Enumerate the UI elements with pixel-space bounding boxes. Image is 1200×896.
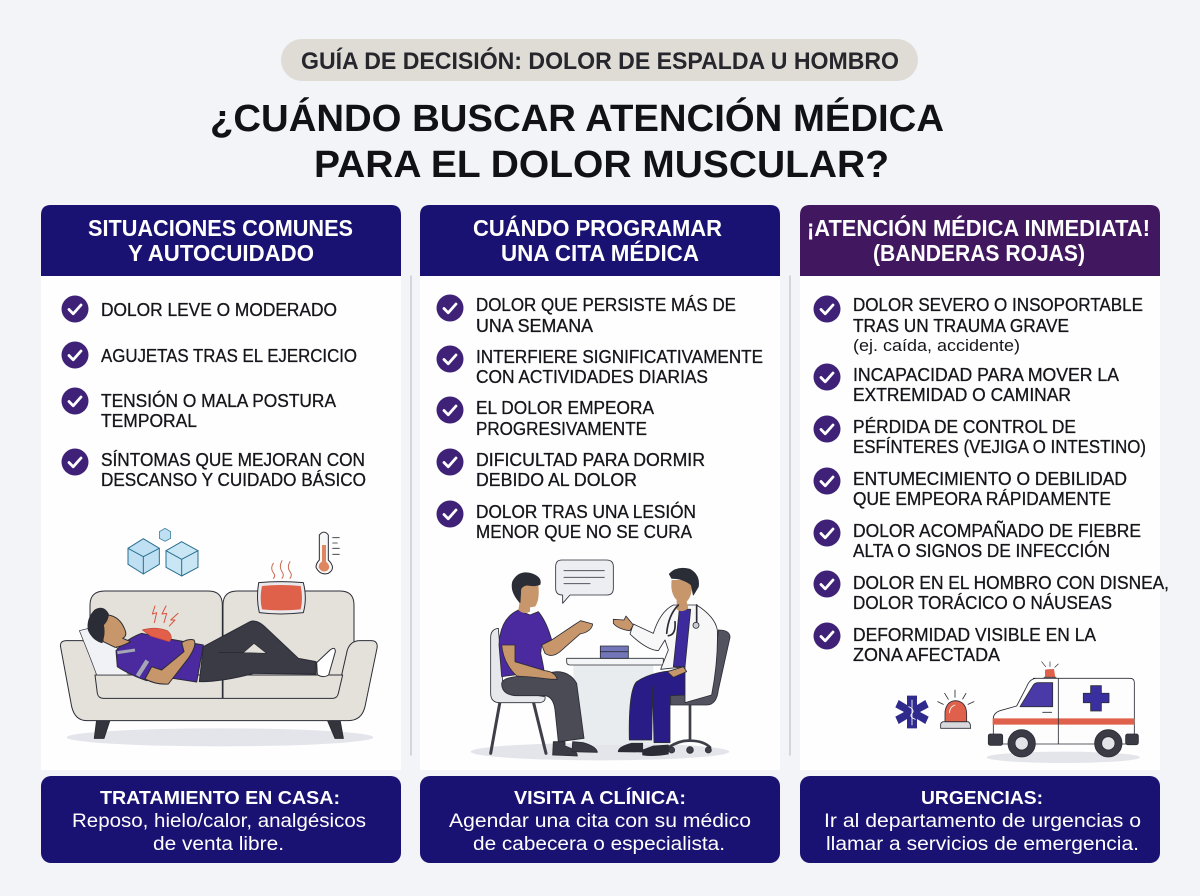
checklist: banderas rojas: ESFÍNTERES (VEJIGA O INTESTINO) [853, 437, 1146, 457]
checklist: banderas rojas: (ej. caída, accidente) [853, 336, 1020, 355]
checklist: situaciones comunes: AGUJETAS TRAS EL EJERCICIO [101, 346, 357, 366]
checklist: situaciones comunes: DESCANSO Y CUIDADO BÁSICO [101, 470, 366, 490]
checklist: banderas rojas: ENTUMECIMIENTO O DEBILIDAD [853, 469, 1127, 489]
checklist: banderas rojas: DOLOR EN EL HOMBRO CON DISNEA, [853, 573, 1169, 593]
checklist: programar cita: DIFICULTAD PARA DORMIR [476, 450, 705, 470]
callout: tratamiento en casa: TRATAMIENTO EN CASA: [100, 788, 340, 808]
title [210, 96, 944, 186]
checklist: banderas rojas: EXTREMIDAD O CAMINAR [853, 385, 1071, 405]
heading: programar cita: CUÁNDO PROGRAMAR [473, 214, 722, 241]
heading: programar cita [420, 205, 780, 276]
title: PARA EL DOLOR MUSCULAR? [314, 144, 889, 186]
checklist: programar cita: DOLOR TRAS UNA LESIÓN [476, 501, 696, 522]
checklist: banderas rojas: DEFORMIDAD VISIBLE EN LA [853, 625, 1096, 645]
heading: situaciones comunes [41, 205, 401, 276]
panel: situaciones comunes [41, 205, 411, 863]
panel: banderas rojas [800, 205, 1169, 863]
callout: visita a clínica: de cabecera o especialista. [473, 834, 725, 855]
checklist: situaciones comunes [62, 296, 366, 490]
checklist: situaciones comunes: SÍNTOMAS QUE MEJORAN CON [101, 450, 365, 470]
callout: tratamiento en casa [41, 776, 401, 863]
checklist: situaciones comunes: TEMPORAL [101, 411, 197, 431]
category pill [281, 39, 918, 81]
checklist: banderas rojas: TRAS UN TRAUMA GRAVE [853, 316, 1069, 336]
heading: programar cita: UNA CITA MÉDICA [501, 239, 699, 266]
checklist: banderas rojas: QUE EMPEORA RÁPIDAMENTE [853, 489, 1111, 509]
checklist: banderas rojas: ZONA AFECTADA [853, 645, 1000, 665]
callout: tratamiento en casa: Reposo, hielo/calor, analgésicos [72, 811, 366, 832]
illustration: ambulance and emergency icons [895, 662, 1140, 763]
illustration: person resting on sofa [60, 528, 377, 746]
checklist: banderas rojas: DOLOR ACOMPAÑADO DE FIEBRE [853, 520, 1141, 541]
checklist: programar cita: PROGRESIVAMENTE [476, 419, 647, 439]
checklist: programar cita: CON ACTIVIDADES DIARIAS [476, 367, 708, 387]
callout: urgencias: llamar a servicios de emergencia. [826, 834, 1139, 855]
checklist: programar cita: EL DOLOR EMPEORA [476, 398, 654, 418]
checklist: programar cita: UNA SEMANA [476, 316, 593, 336]
callout: visita a clínica: Agendar una cita con su médico [449, 811, 751, 832]
panel: programar cita [420, 205, 790, 863]
checklist: programar cita: INTERFIERE SIGNIFICATIVAMENTE [476, 347, 763, 367]
heading: banderas rojas: (BANDERAS ROJAS) [873, 240, 1085, 266]
callout: visita a clínica: VISITA A CLÍNICA: [514, 787, 686, 808]
category pill: GUÍA DE DECISIÓN: DOLOR DE ESPALDA U HOMBRO [301, 47, 899, 75]
checklist: programar cita [436, 294, 763, 542]
checklist: banderas rojas: DOLOR TORÁCICO O NÁUSEAS [853, 593, 1112, 613]
checklist: banderas rojas: INCAPACIDAD PARA MOVER LA [853, 365, 1119, 385]
checklist: situaciones comunes: DOLOR LEVE O MODERADO [101, 300, 337, 320]
checklist: banderas rojas: PÉRDIDA DE CONTROL DE [853, 417, 1076, 437]
checklist: banderas rojas [814, 295, 1169, 665]
callout: tratamiento en casa: de venta libre. [153, 834, 284, 855]
checklist: programar cita: MENOR QUE NO SE CURA [476, 522, 692, 542]
heading: situaciones comunes: SITUACIONES COMUNES [88, 215, 353, 241]
checklist: programar cita: DEBIDO AL DOLOR [476, 470, 637, 490]
heading: banderas rojas [800, 205, 1160, 276]
callout: visita a clínica [420, 776, 780, 863]
checklist: banderas rojas: DOLOR SEVERO O INSOPORTABLE [853, 295, 1143, 315]
checklist: programar cita: DOLOR QUE PERSISTE MÁS DE [476, 295, 736, 315]
checklist: banderas rojas: ALTA O SIGNOS DE INFECCIÓN [853, 540, 1110, 561]
callout: urgencias: Ir al departamento de urgencias o [824, 811, 1141, 832]
callout: urgencias: URGENCIAS: [921, 788, 1043, 808]
heading: banderas rojas: ¡ATENCIÓN MÉDICA INMEDIATA! [807, 214, 1150, 241]
illustration: patient and doctor [471, 560, 730, 760]
title: ¿CUÁNDO BUSCAR ATENCIÓN MÉDICA [210, 96, 944, 140]
heading: situaciones comunes: Y AUTOCUIDADO [128, 240, 314, 266]
callout: urgencias [800, 776, 1160, 863]
checklist: situaciones comunes: TENSIÓN O MALA POSTURA [101, 390, 336, 411]
